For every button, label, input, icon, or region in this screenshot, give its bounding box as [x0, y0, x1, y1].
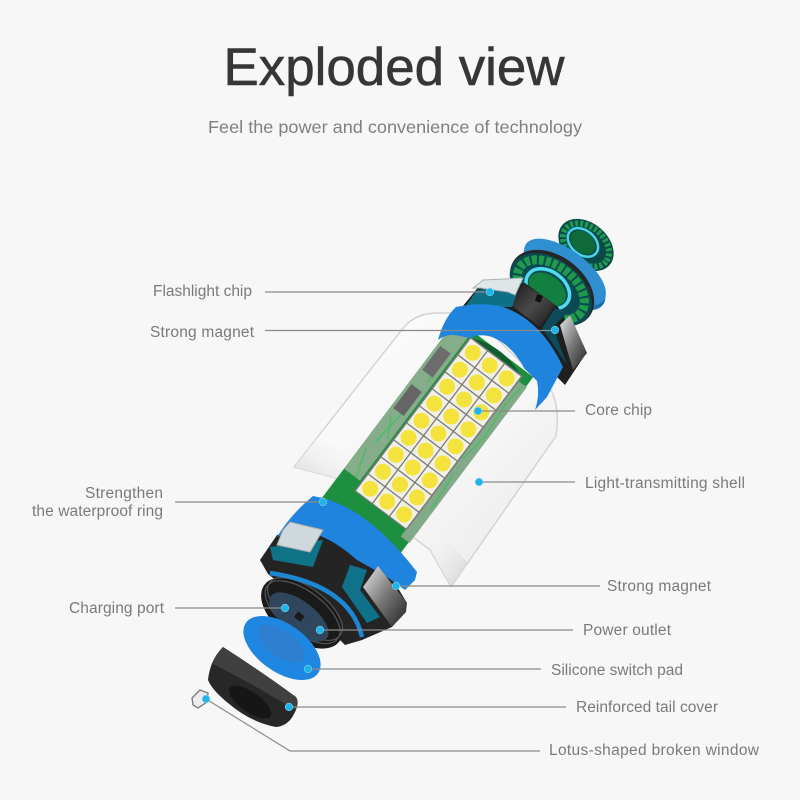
label: core chip: Core chip	[585, 402, 652, 419]
light-transmitting shell	[294, 313, 557, 587]
chip one	[422, 346, 451, 378]
title: Exploded view	[224, 38, 565, 97]
flashlight chip glass	[473, 278, 523, 295]
top collar	[463, 283, 585, 385]
subtitle: Feel the power and convenience of technology	[208, 117, 582, 137]
lower magnet	[363, 566, 407, 627]
lower left circuit window	[270, 540, 323, 567]
waterproof window glass	[277, 522, 323, 552]
small circuit disc	[548, 208, 624, 282]
blue ring	[270, 573, 362, 637]
label: waterproof ring	[32, 485, 163, 520]
top circuit window	[465, 285, 520, 307]
threaded cap	[248, 563, 356, 663]
label: silicone switch pad: Silicone switch pad	[551, 662, 683, 679]
right translucent strip	[401, 381, 527, 543]
chip two	[393, 384, 422, 416]
large circuit disc	[495, 234, 609, 342]
label: waterproof ring: the waterproof ring	[32, 503, 163, 520]
side circuit window	[542, 308, 567, 365]
label: charging port: Charging port	[69, 600, 165, 617]
label: power outlet: Power outlet	[583, 622, 672, 639]
shell right tip shading	[430, 535, 468, 587]
label: strong magnet top: Strong magnet	[150, 324, 255, 341]
lower collar	[260, 528, 407, 645]
reinforced tail cover	[208, 647, 298, 727]
shell left tip shading	[294, 439, 352, 479]
lower right circuit window	[342, 565, 380, 623]
LED panel	[354, 337, 523, 530]
lotus-shaped broken window	[192, 690, 208, 708]
top blue band	[438, 304, 563, 410]
label: reinforced tail cover: Reinforced tail cover	[576, 699, 718, 716]
label: light-transmitting shell: Light-transmitting shell	[585, 475, 745, 492]
top collar hole	[535, 294, 543, 303]
label: waterproof ring: Strengthen	[85, 485, 163, 502]
top collar centre highlight	[512, 283, 555, 327]
label: flashlight chip: Flashlight chip	[153, 283, 252, 300]
leader lines	[175, 292, 600, 751]
label: lotus-shaped broken window: Lotus-shaped broken window	[549, 742, 760, 759]
callout dots	[202, 288, 559, 711]
circuit board	[317, 319, 534, 563]
label: strong magnet bottom: Strong magnet	[607, 578, 712, 595]
exploded flashlight illustration	[192, 208, 624, 727]
board top dark arc	[469, 332, 526, 378]
left translucent strip	[344, 325, 468, 481]
top magnet	[560, 315, 587, 370]
lower blue band	[277, 496, 417, 590]
silicone switch pad	[232, 603, 332, 693]
blue disc	[510, 226, 618, 323]
